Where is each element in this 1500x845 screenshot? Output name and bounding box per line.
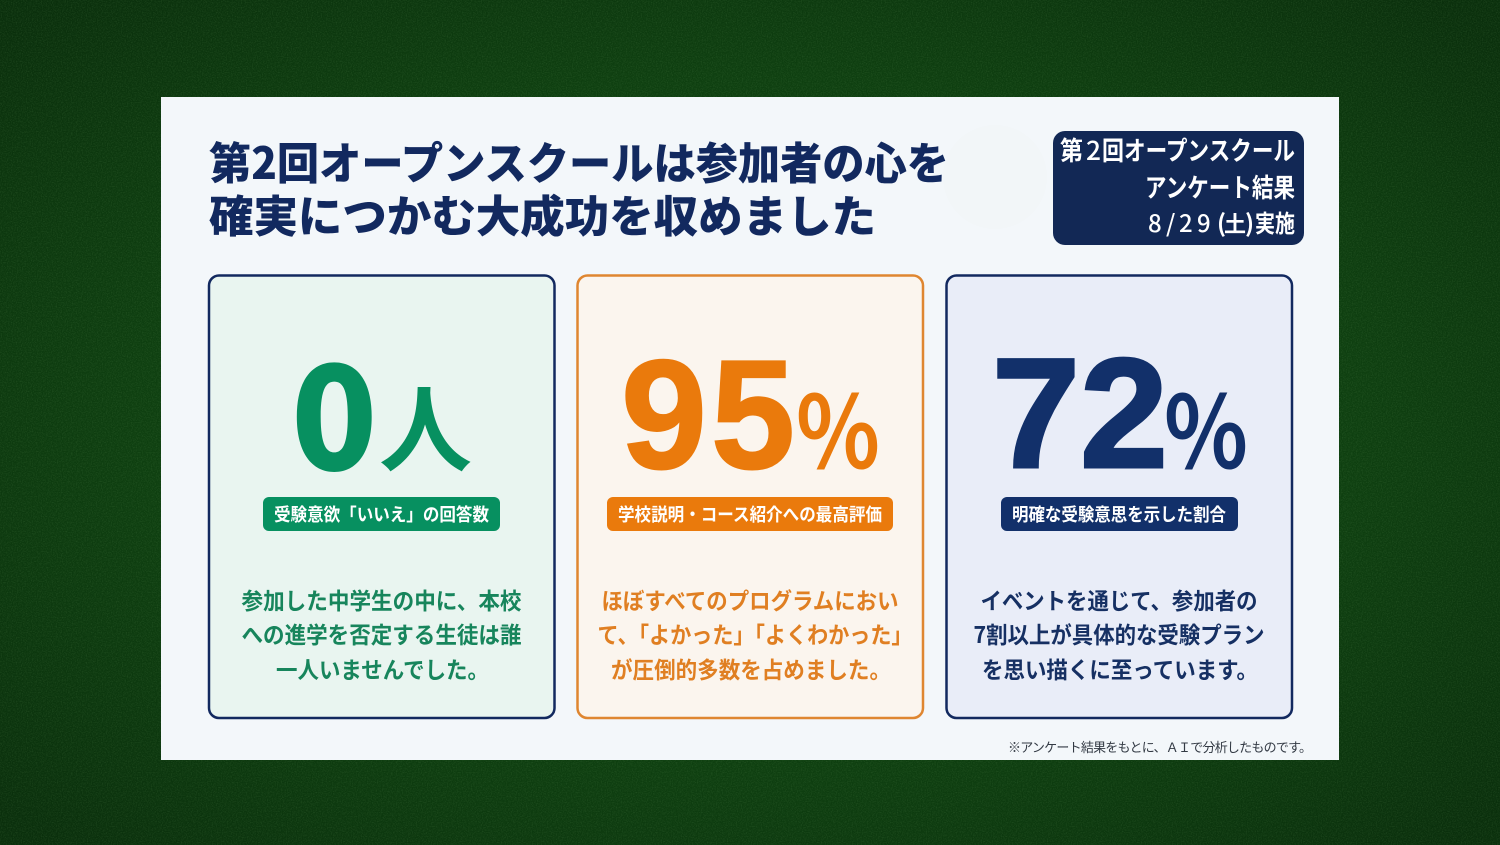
date tag: survey results: 実施 (1255, 204, 1295, 239)
date tag: survey results: 土 (1224, 207, 1246, 239)
body text: ほぼすべてのプログラムにおい (602, 582, 898, 616)
big number: 95%: 5 (711, 328, 795, 501)
big number: 72%: 2 (1080, 327, 1168, 501)
body text: て、「よかった」「よくわかった」 (598, 616, 912, 650)
big number: 72%: % (1164, 352, 1248, 497)
title: 第2回オープンスクールは参加者の心を (209, 128, 949, 192)
date tag: survey results: 2 (1179, 204, 1193, 239)
body text (598, 582, 912, 685)
body text: が圧倒的多数を占めました。 (611, 651, 891, 685)
body text: イベントを通じて、参加者の (980, 582, 1258, 616)
big number: 72% (992, 327, 1248, 501)
big number: 95%: % (796, 352, 880, 497)
title: 確実につかむ大成功を収めました (209, 181, 876, 245)
date tag: survey results: 回 (1102, 131, 1124, 168)
body text: 一人いませんでした。 (276, 651, 489, 685)
badge: no responses: 受験意欲「いいえ」の回答数 (274, 501, 489, 527)
big number: 0人: 人 (379, 356, 472, 491)
badge: top rating: 学校説明・コース紹介への最高評価 (618, 501, 882, 527)
footnote: ※アンケート結果をもとに、ＡＩで分析したものです。 (1008, 737, 1312, 756)
big number: 72%: 7 (992, 327, 1080, 501)
panel: card 72 percent (946, 276, 1292, 718)
big number: 0人 (291, 305, 472, 511)
big number: 95% (621, 328, 880, 501)
date tag: survey results: 2 (1086, 131, 1101, 168)
panel: card 0 people (209, 276, 554, 718)
date tag: survey results: ) (1245, 204, 1254, 239)
body text (242, 582, 522, 685)
panel: card 95 percent (578, 276, 923, 718)
body text: 7割以上が具体的な受験プラン (974, 616, 1264, 650)
body text (974, 582, 1264, 685)
date tag: survey results: ( (1217, 204, 1226, 239)
date tag: survey results: / (1166, 204, 1175, 239)
date tag: survey results (1053, 131, 1304, 245)
body text: への進学を否定する生徒は誰 (242, 616, 522, 650)
date tag: survey results: 8 (1148, 204, 1162, 239)
date tag: survey results: 第 (1060, 131, 1083, 168)
big number: 95%: 9 (621, 328, 707, 501)
badge: clear intent: 明確な受験意思を示した割合 (1012, 501, 1226, 527)
date tag: survey results: オープンスクール (1124, 131, 1295, 168)
title (209, 128, 949, 245)
panel: white slide (161, 97, 1339, 760)
big number: 0人: 0 (291, 305, 377, 511)
date tag: survey results: 9 (1197, 204, 1211, 239)
body text: を思い描くに至っています。 (982, 651, 1258, 685)
body text: 参加した中学生の中に、本校 (242, 582, 522, 616)
date tag: survey results: アンケート結果 (1145, 168, 1295, 205)
